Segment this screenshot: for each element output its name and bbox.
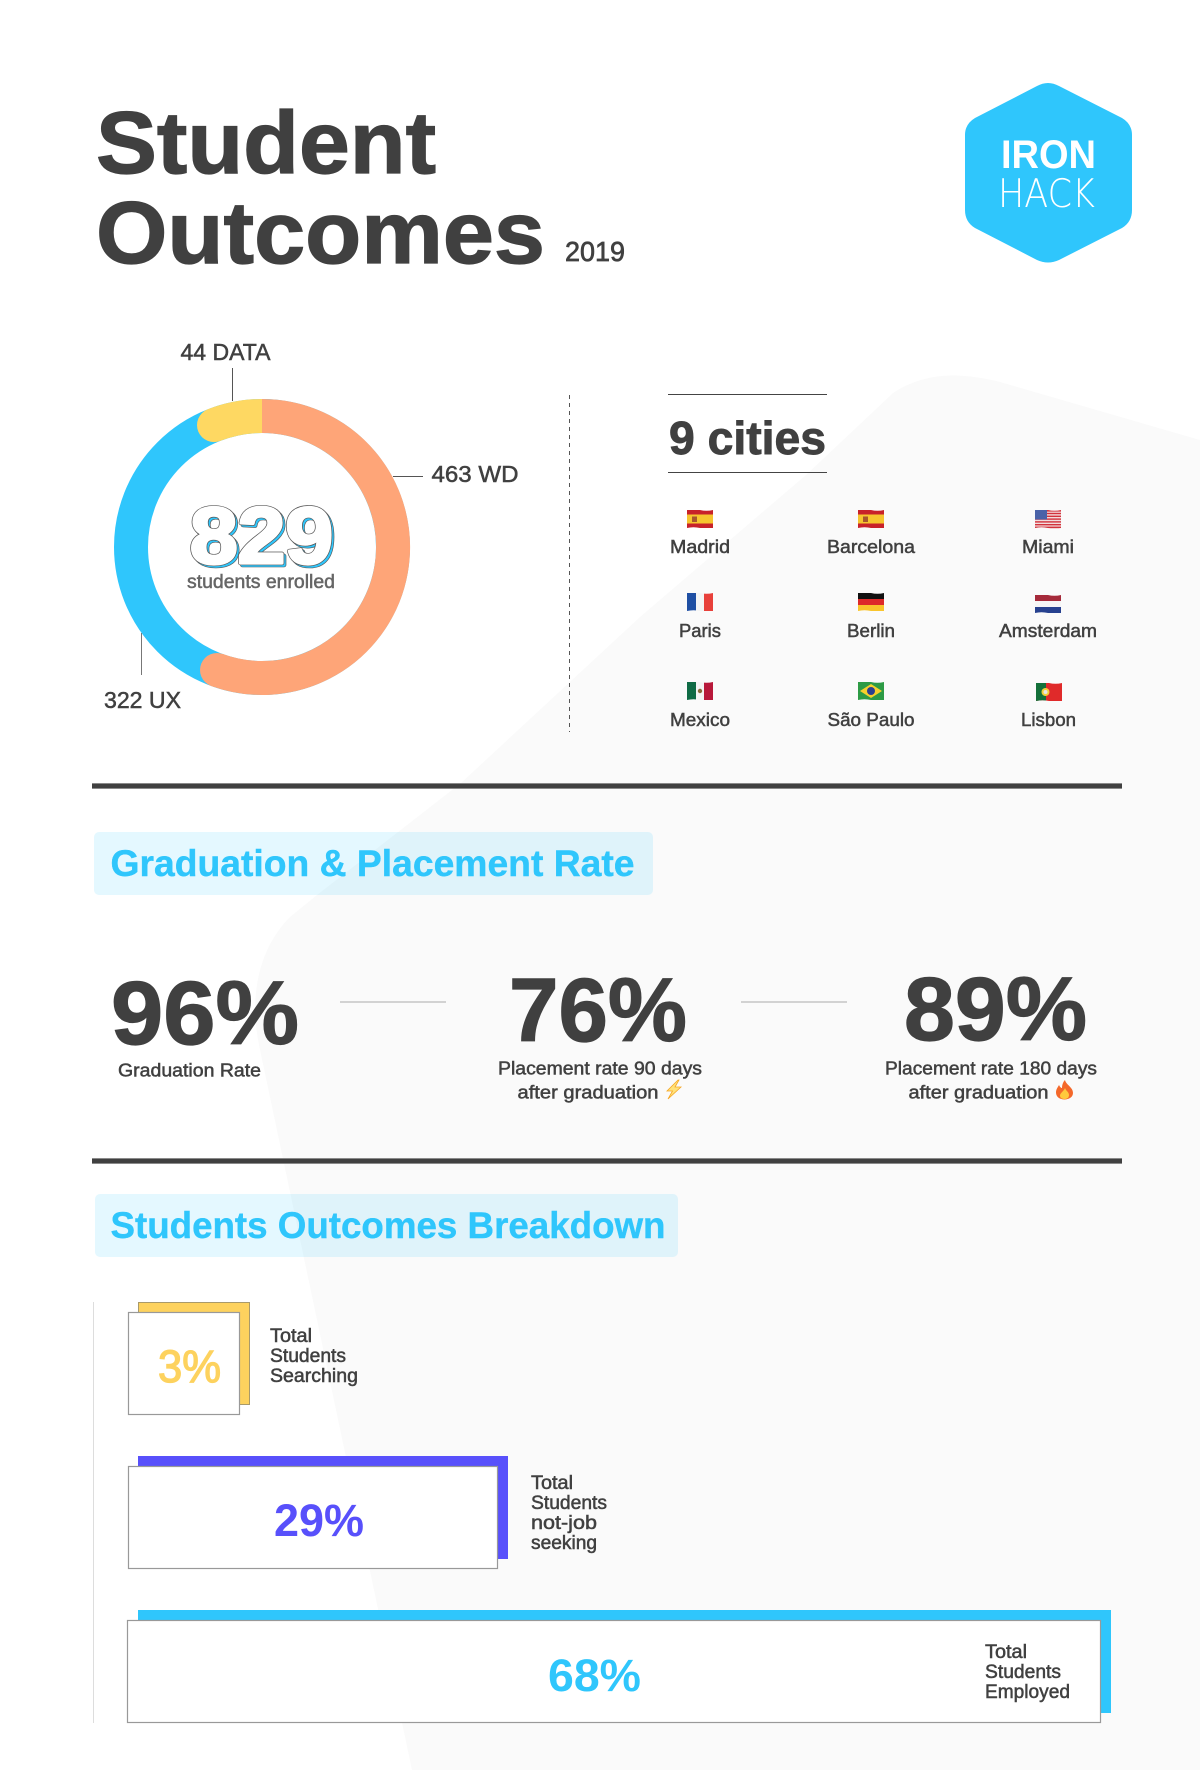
city: Mexico [670, 682, 730, 730]
centre total: 829: 829 [192, 493, 335, 582]
logo: Ironhack hexagon: HACK [998, 172, 1095, 217]
stat: 76% placement at 90 days: 76% [509, 961, 687, 1061]
title [96, 93, 545, 282]
city: Miami: Miami [1022, 536, 1074, 557]
centre total: 829: 829 [190, 491, 333, 580]
city: Paris: Paris [679, 620, 721, 641]
heading: Students Outcomes Breakdown: Students Outcomes Breakdown [110, 1205, 666, 1246]
stat: 89% placement at 180 days: 89% [904, 960, 1087, 1060]
city: Barcelona [827, 510, 916, 557]
city: Lisbon: Lisbon [1021, 709, 1076, 730]
centre caption: students enrolled [187, 572, 335, 593]
city: Berlin: Berlin [847, 620, 895, 641]
heading: Graduation & Placement Rate: Graduation & Placement Rate [110, 843, 634, 884]
leader line: UX [140, 633, 142, 675]
caption [885, 1058, 1097, 1102]
panel: 9 cities [668, 394, 1097, 730]
heading: Students Outcomes Breakdown [95, 1194, 678, 1257]
ring segment: DATA [197, 408, 262, 442]
title: Student [96, 93, 436, 192]
title: Outcomes [96, 183, 545, 282]
city: Lisbon [1021, 683, 1076, 730]
caption: Placement rate 90 days [498, 1058, 702, 1078]
label [270, 1326, 358, 1387]
heading: Graduation & Placement Rate [94, 832, 653, 895]
stat: 96% graduation rate: 96% [111, 964, 299, 1064]
city: Amsterdam: Amsterdam [999, 620, 1097, 641]
label: 322 UX: 322 UX [104, 687, 181, 713]
caption: Graduation Rate [118, 1060, 261, 1080]
logo: Ironhack hexagon [965, 83, 1132, 262]
logo: Ironhack hexagon: IRON [1001, 133, 1096, 177]
label: Students [985, 1662, 1061, 1683]
city: Berlin [848, 593, 894, 638]
label: Total [270, 1326, 312, 1347]
bar: 3% searching [128, 1302, 358, 1414]
icon: lightning bolt [667, 1080, 681, 1099]
centre total: 829: 829 [192, 493, 335, 582]
label: Searching [270, 1366, 358, 1387]
label: not-job [531, 1513, 597, 1534]
label [531, 1473, 607, 1554]
city: Barcelona: Barcelona [827, 536, 916, 557]
label: Students [270, 1346, 346, 1367]
caption: after graduation [518, 1082, 658, 1102]
city: Sao Paulo [828, 682, 914, 730]
label: 463 WD: 463 WD [432, 461, 518, 487]
value: 29% [274, 1495, 364, 1546]
label: Total [531, 1473, 573, 1494]
caption [498, 1058, 702, 1102]
city: Mexico: Mexico [670, 709, 730, 730]
label: seeking [531, 1533, 597, 1554]
city: Madrid: Madrid [670, 536, 730, 557]
label: Students [531, 1493, 607, 1514]
label [985, 1642, 1070, 1703]
stat: 76% placement at 90 days [498, 961, 702, 1102]
bar: 68% employed [128, 1610, 1111, 1722]
donut chart: students by track [104, 339, 518, 713]
label: Employed [985, 1682, 1070, 1703]
centre total: 829: 829 [190, 491, 333, 580]
ring segment: UX [131, 416, 393, 678]
value: 68% [548, 1650, 641, 1701]
city: Madrid [670, 510, 730, 557]
leader line: DATA [232, 368, 234, 401]
city: Sao Paulo: São Paulo [828, 709, 914, 730]
bar: 29% not job seeking [128, 1456, 607, 1568]
leader line: WD [393, 476, 423, 478]
caption: Placement rate 180 days [885, 1058, 1097, 1078]
label: 44 DATA: 44 DATA [180, 339, 271, 365]
stat: 89% placement at 180 days [885, 960, 1097, 1102]
city: Paris [680, 593, 720, 638]
city: Amsterdam [999, 595, 1097, 641]
value: 3% [158, 1341, 221, 1392]
ring segment: WD [200, 416, 393, 687]
heading: 9 cities: 9 cities [669, 412, 826, 464]
caption: after graduation [908, 1082, 1048, 1102]
icon: flame [1056, 1080, 1073, 1100]
city: Miami [1023, 510, 1073, 554]
label: Total [985, 1642, 1027, 1663]
year label: 2019 [565, 236, 625, 267]
